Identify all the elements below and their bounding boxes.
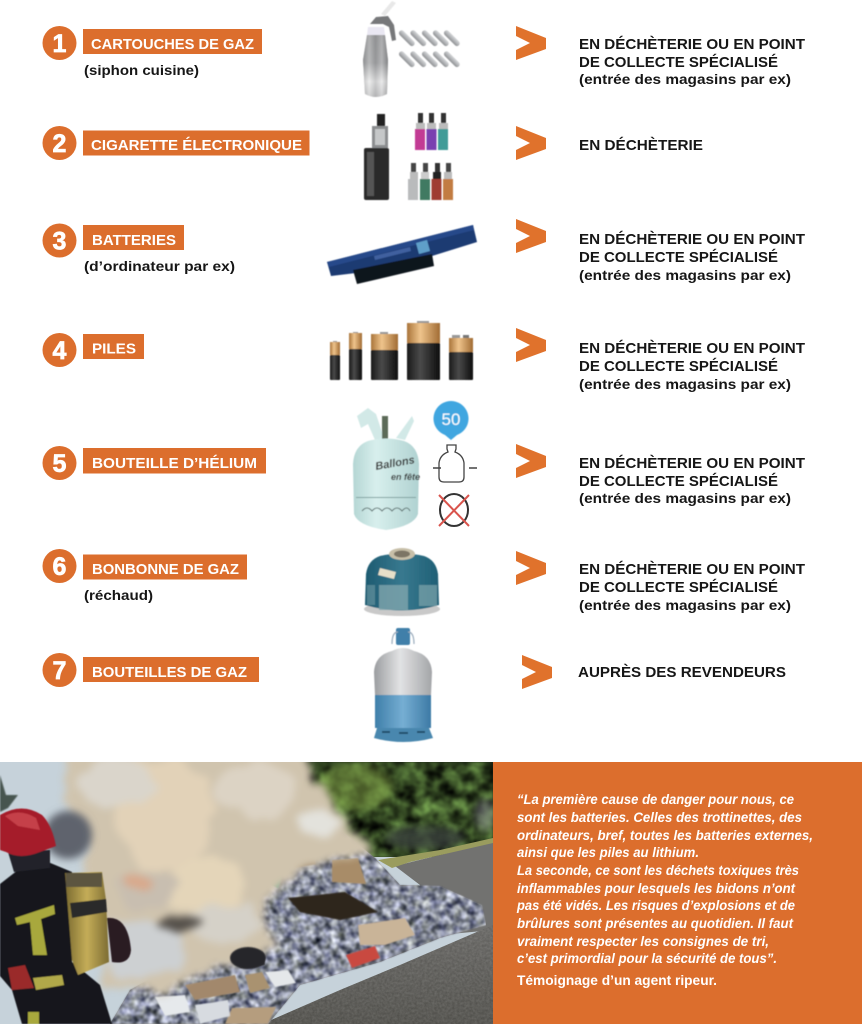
heading: bonbonne de gaz: BONBONNE DE GAZ: [92, 561, 239, 578]
note: réchaud: (réchaud): [84, 587, 153, 603]
destination text: EN DÉCHÈTERIE OU EN POINT: [579, 36, 805, 53]
quote text: sont les batteries. Celles des trottinettes, des: [517, 809, 802, 825]
destination text: DE COLLECTE SPÉCIALISÉ: [579, 54, 778, 71]
number badge 4: 4: [53, 337, 67, 365]
number badge 7: [42, 653, 76, 687]
image: gas bottle: [374, 628, 433, 742]
number badge 5: [42, 446, 76, 480]
row 3: batteries: [42, 219, 805, 284]
image: gas canister: [364, 548, 440, 616]
destination text: [579, 340, 805, 392]
compressed gas icon: [433, 445, 477, 482]
number badge 3: [42, 224, 76, 258]
number badge 5: 5: [53, 450, 67, 478]
arrow: [516, 328, 546, 362]
note: ordinateur: (d’ordinateur par ex): [84, 258, 235, 274]
destination text: (entrée des magasins par ex): [579, 490, 791, 506]
quote text: inflammables pour lesquels les bidons n’ont: [517, 880, 796, 896]
destination text: EN DÉCHÈTERIE OU EN POINT: [579, 340, 805, 357]
quote text: vraiment respecter les consignes de tri,: [517, 933, 769, 949]
heading: piles: PILES: [92, 340, 136, 358]
badge 50: 50: [442, 410, 460, 429]
heading: bonbonne de gaz: [83, 554, 247, 580]
number badge 2: 2: [53, 130, 66, 158]
number badge 1: 1: [53, 30, 67, 58]
quote text: ainsi que les piles au lithium.: [517, 844, 699, 860]
photo: burning waste pile with firefighter: [0, 750, 495, 1024]
row 5: bouteille d'hélium: [42, 401, 805, 530]
destination text: DE COLLECTE SPÉCIALISÉ: [579, 249, 778, 266]
crossed bottle icon: [439, 494, 469, 526]
row 6: bonbonne de gaz: [42, 548, 805, 616]
quote text: brûlures sont présentes au quotidien. Il faut: [517, 915, 794, 931]
destination text: [579, 36, 805, 87]
quote text: La seconde, ce sont les déchets toxiques très: [517, 862, 799, 878]
firefighter: [0, 808, 131, 1024]
number badge 2: [42, 126, 76, 160]
destination text: [579, 231, 805, 283]
waste pile: [110, 830, 486, 1024]
heading: batteries: BATTERIES: [92, 232, 176, 249]
burnt dark patch: [230, 947, 266, 969]
destination text: (entrée des magasins par ex): [579, 597, 791, 613]
quote text: [516, 791, 813, 966]
arrow: [516, 444, 546, 478]
heading: cigarette électronique: [83, 130, 310, 156]
destination text: (entrée des magasins par ex): [579, 267, 791, 283]
quote text: ordinateurs, bref, toutes les batteries externes,: [517, 827, 813, 843]
roads: [262, 838, 493, 1024]
destination text: DE COLLECTE SPÉCIALISÉ: [579, 358, 778, 375]
row 1: cartouches de gaz: [42, 1, 805, 97]
dark smoke behind firefighter: [44, 811, 92, 859]
helium tank: Ballons: [374, 454, 416, 473]
testimony panel: [493, 762, 862, 1024]
arrow: [516, 26, 546, 60]
row 2: cigarette électronique: [42, 113, 703, 200]
heading: cartouches de gaz: CARTOUCHES DE GAZ: [91, 36, 254, 53]
destination text: EN DÉCHÈTERIE OU EN POINT: [579, 231, 805, 248]
image: batteries row: [330, 321, 473, 380]
destination text: EN DÉCHÈTERIE OU EN POINT: [579, 561, 805, 578]
destination text: EN DÉCHÈTERIE OU EN POINT: [579, 455, 805, 472]
destination text: [579, 455, 805, 506]
image: siphon and capsules: [363, 1, 461, 97]
number badge 4: [42, 333, 76, 367]
number badge 1: [42, 26, 76, 60]
heading: bouteilles de gaz: BOUTEILLES DE GAZ: [92, 664, 247, 681]
arrow: [516, 126, 546, 160]
number badge 7: 7: [53, 657, 66, 685]
destination text: EN DÉCHÈTERIE: [579, 137, 703, 154]
image: laptop battery: [327, 225, 477, 284]
heading: piles: [83, 334, 144, 359]
row 4: piles: [42, 321, 805, 392]
number badge 3: 3: [53, 228, 66, 256]
heading: bouteilles de gaz: [83, 657, 259, 682]
heading: bouteille d'hélium: BOUTEILLE D’HÉLIUM: [92, 455, 257, 472]
arrow: [516, 219, 546, 253]
heading: cartouches de gaz: [83, 29, 262, 54]
heading: cigarette électronique: CIGARETTE ÉLECTRONIQUE: [91, 137, 302, 154]
smoke: [62, 750, 372, 992]
helium tank: en fête: [391, 472, 420, 482]
destination text: (entrée des magasins par ex): [579, 376, 791, 392]
helium tank: [353, 408, 420, 530]
quote attribution: Témoignage d’un agent ripeur.: [517, 972, 717, 988]
row 7: bouteilles de gaz: [42, 628, 786, 742]
sky: [0, 762, 493, 1024]
quote text: “La première cause de danger pour nous, ce: [517, 791, 794, 807]
destination text: DE COLLECTE SPÉCIALISÉ: [579, 473, 778, 490]
image: helium tank with pictograms: [353, 401, 477, 530]
destination text: AUPRÈS DES REVENDEURS: [578, 664, 786, 681]
number badge 6: 6: [53, 553, 66, 581]
destination text: (entrée des magasins par ex): [579, 71, 791, 87]
quote text: c’est primordial pour la sécurité de tous”.: [517, 950, 777, 966]
arrow: [516, 551, 546, 585]
quote text: pas été vidés. Les risques d’explosions et de: [516, 897, 795, 913]
image: vapes: [364, 113, 453, 200]
number badge 6: [42, 549, 76, 583]
arrow: [522, 655, 552, 689]
distant tree: [0, 775, 18, 812]
note: siphon cuisine: (siphon cuisine): [84, 62, 199, 78]
heading: batteries: [83, 225, 184, 250]
trees: [290, 762, 495, 857]
destination text: DE COLLECTE SPÉCIALISÉ: [579, 579, 778, 596]
heading: bouteille d'hélium: [83, 448, 266, 474]
destination text: [579, 561, 805, 613]
